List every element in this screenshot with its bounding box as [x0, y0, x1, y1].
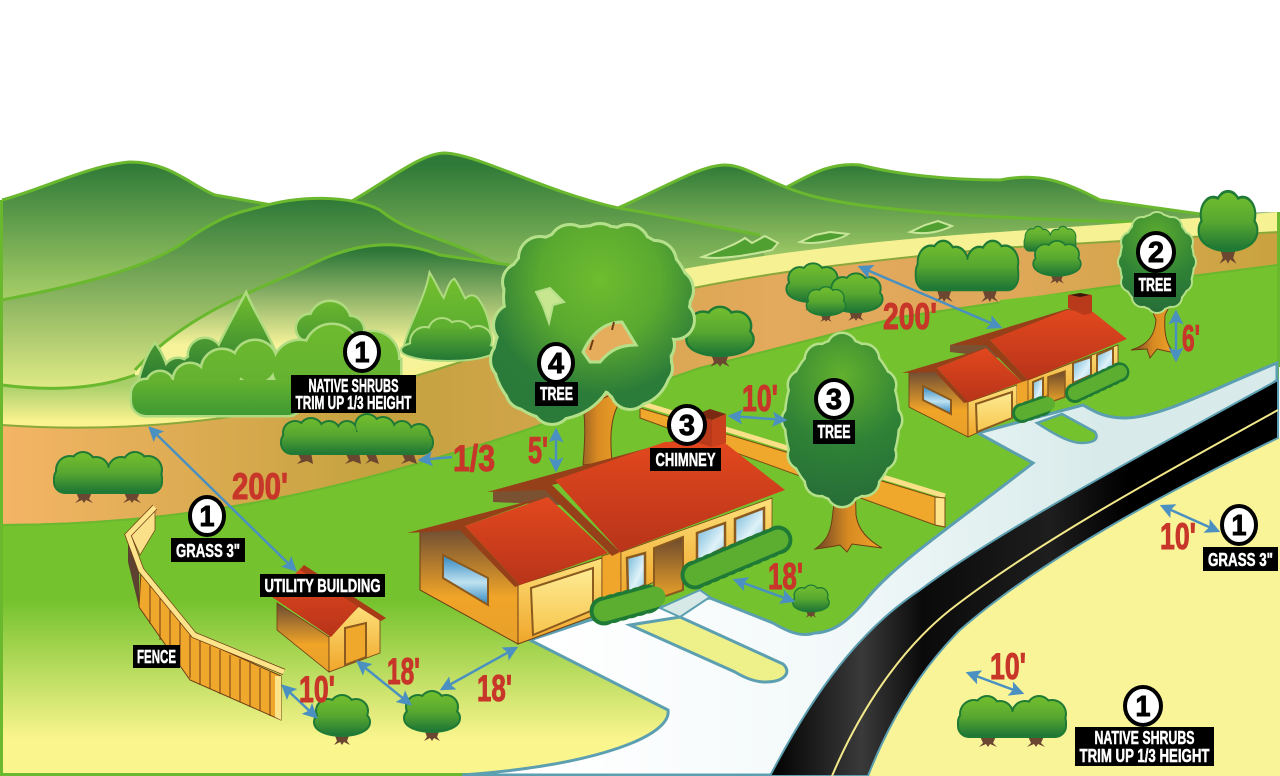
frame border	[0, 200, 1280, 776]
callout 1 native shrubs right: NATIVE SHRUBS	[1094, 728, 1194, 748]
utility building	[272, 565, 386, 672]
shrub cluster native shrubs	[132, 295, 400, 415]
callout 4 tree: TREE	[540, 384, 573, 404]
shrubs trimmed row	[282, 415, 432, 464]
callout 1 native shrubs: NATIVE SHRUBS	[308, 376, 398, 396]
callout 3 chimney: CHIMNEY	[656, 450, 716, 470]
chimney	[695, 409, 726, 447]
fence behind house	[640, 403, 945, 527]
shrubs near utility building	[315, 692, 459, 745]
big tree 4	[492, 225, 693, 465]
garage front wall	[518, 558, 602, 644]
shrub beside big tree	[688, 308, 752, 367]
callout 1 native shrubs	[291, 333, 416, 413]
link wall	[602, 550, 621, 610]
meadow edge line	[2, 375, 135, 388]
callout 3 tree: 3	[826, 384, 842, 416]
distance labels: 6'	[1182, 318, 1200, 359]
distance labels: 5'	[528, 430, 548, 471]
house 1	[407, 409, 785, 644]
distance labels: 1/3	[453, 438, 495, 479]
far right tall shrub	[1200, 193, 1256, 264]
distance labels: 200'	[232, 466, 288, 507]
shrubs behind house two	[787, 227, 1080, 322]
label utility building: UTILITY BUILDING	[264, 576, 380, 596]
label fence: FENCE	[137, 647, 176, 667]
grass island driveway 2	[1037, 414, 1097, 443]
callout 2 tree	[1134, 233, 1176, 297]
callout 4 tree	[535, 344, 578, 406]
garage roof	[465, 497, 608, 585]
tree 2	[1119, 213, 1195, 358]
distance labels: 18'	[768, 556, 803, 597]
distance labels: 10'	[990, 646, 1026, 687]
label fence	[133, 645, 180, 668]
front step	[660, 590, 710, 617]
shrubs left double	[55, 453, 161, 503]
brown firebreak band	[2, 232, 1278, 525]
connecting wall	[493, 486, 560, 505]
callout 1 grass	[171, 497, 245, 562]
label utility building	[260, 574, 385, 597]
callout 1 grass: 1	[200, 501, 214, 533]
main wall	[621, 498, 772, 597]
distance labels: 10'	[1160, 516, 1196, 557]
garage eave	[407, 496, 548, 587]
tree gap	[583, 322, 636, 362]
foreground hill	[135, 245, 640, 400]
meadow left band	[2, 375, 300, 430]
callout 1 native shrubs right: TRIM UP 1/3 HEIGHT	[1080, 746, 1210, 766]
shrub cluster hillside	[402, 275, 494, 360]
callout 1 grass: GRASS 3"	[176, 541, 240, 561]
lawn right of driveway	[710, 270, 1277, 635]
tree 3	[783, 334, 901, 552]
callout 3 chimney: 3	[679, 410, 695, 442]
front door	[654, 537, 683, 600]
fence left	[128, 507, 284, 720]
distance labels: 200'	[883, 296, 937, 337]
distance labels: 18'	[387, 651, 420, 692]
distance labels: 18'	[477, 668, 512, 709]
far bushes	[702, 221, 952, 258]
callout 1 grass right: 1	[1232, 510, 1246, 542]
callout 1 grass right	[1203, 506, 1278, 571]
yellow field right of road	[868, 438, 1280, 776]
shrubs bottom right	[959, 697, 1065, 747]
green lawn	[2, 265, 1278, 776]
front windows	[627, 508, 764, 593]
distance labels	[232, 296, 1200, 710]
side window	[443, 555, 488, 605]
callout 3 chimney	[650, 406, 721, 471]
callout 1 native shrubs: 1	[354, 337, 370, 369]
road	[770, 380, 1278, 776]
house 2 hedges	[1022, 372, 1120, 413]
shrub near house 1	[793, 586, 829, 618]
road centre line	[832, 410, 1278, 776]
main roof	[555, 442, 785, 552]
callout 2 tree: TREE	[1138, 275, 1172, 295]
grass island driveway 1	[630, 617, 787, 682]
house 1 hedges	[604, 540, 778, 611]
callout 4 tree: 4	[548, 348, 564, 380]
distance labels: 10'	[742, 378, 778, 419]
distant mountains	[2, 153, 1278, 420]
callout 1 native shrubs right: 1	[1136, 691, 1150, 723]
concrete driveway	[462, 363, 1277, 775]
distance labels: 10'	[299, 669, 335, 710]
ridge eave	[487, 440, 725, 556]
callout 3 tree	[813, 380, 855, 444]
yellow meadow band	[0, 212, 1278, 440]
garage side wall	[420, 526, 518, 644]
callout 1 native shrubs: TRIM UP 1/3 HEIGHT	[296, 393, 412, 413]
garage door	[531, 568, 593, 635]
callout 2 tree: 2	[1148, 237, 1164, 269]
callout 1 native shrubs right	[1075, 687, 1214, 766]
house 2	[902, 293, 1127, 437]
distance arrows	[150, 267, 1218, 717]
hill ridge line	[135, 245, 510, 370]
callout 3 tree: TREE	[818, 422, 850, 442]
